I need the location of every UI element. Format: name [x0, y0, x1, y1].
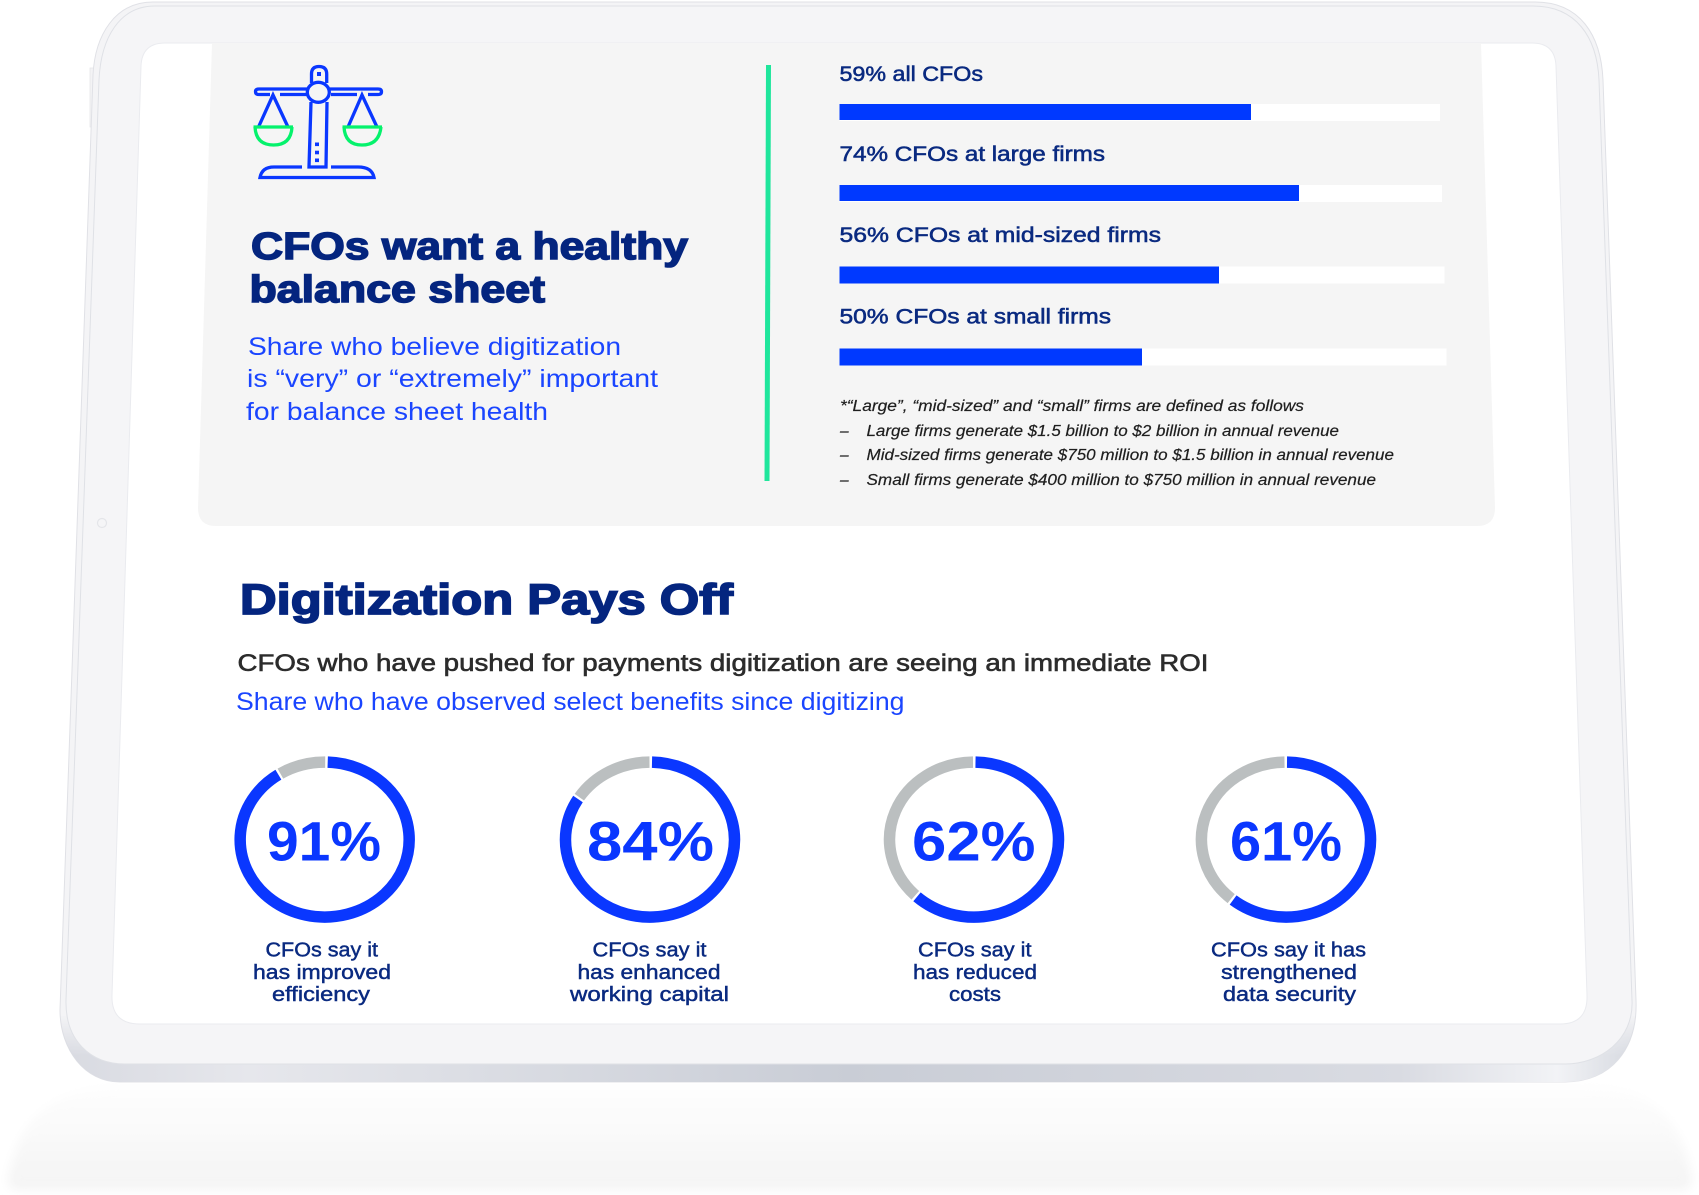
green divider — [764, 65, 771, 481]
heading: Digitization Pays Off: Digitization Pays Off — [240, 576, 734, 624]
bar: large firms — [840, 143, 1442, 202]
donut: 84% enhanced working capital: 84% — [587, 810, 714, 873]
donut: 91% improved efficiency — [240, 762, 409, 1006]
caption: strengthened data security: CFOs say it has — [1211, 940, 1366, 962]
bar: small firms: 50% CFOs at small firms — [840, 306, 1111, 328]
heading: CFOs want a healthy balance sheet — [250, 226, 688, 311]
bar: large firms: 74% CFOs at large firms — [840, 143, 1105, 166]
footnote: firm size definitions: *“Large”, “mid-sized” and “small” firms are defined as follows — [840, 398, 1304, 415]
tablet bottom edge band — [62, 1026, 1634, 1082]
side button — [90, 68, 94, 127]
bar: all CFOs — [840, 63, 1440, 121]
bar: all CFOs: 59% all CFOs — [840, 63, 983, 86]
heading: CFOs want a healthy balance sheet: CFOs want a healthy — [251, 226, 688, 268]
text block: share who believe: for balance sheet health — [246, 398, 548, 426]
icon: balance scale — [254, 66, 382, 178]
caption: reduced costs: costs — [949, 984, 1001, 1006]
caption: enhanced working capital: has enhanced — [578, 962, 720, 984]
donut: 62% reduced costs — [890, 762, 1058, 1006]
caption: improved efficiency — [253, 940, 391, 1006]
footnote: firm size definitions: – — [839, 423, 849, 440]
caption: reduced costs — [913, 940, 1037, 1006]
footnote: firm size definitions: Large firms generate $1.5 billion to $2 billion in annual revenue — [866, 423, 1339, 440]
caption: improved efficiency: efficiency — [272, 984, 370, 1006]
caption: reduced costs: CFOs say it — [918, 940, 1032, 962]
footnote: firm size definitions: – — [839, 447, 849, 464]
text block: share who believe — [246, 333, 658, 426]
camera dot — [98, 518, 106, 528]
caption: strengthened data security: data security — [1223, 984, 1356, 1006]
caption: enhanced working capital — [569, 940, 729, 1006]
tablet ground shadow — [8, 1084, 1692, 1190]
tablet screen — [112, 43, 1587, 1024]
panel: balance sheet — [198, 43, 1495, 526]
bar: mid-sized firms — [840, 224, 1444, 284]
subheading: immediate ROI: CFOs who have pushed for payments digitization are seeing an immediate ROI — [238, 650, 1208, 677]
footnote: firm size definitions: Small firms generate $400 million to $750 million in annual revenue — [866, 472, 1376, 489]
text block: share who observed benefits: Share who have observed select benefits since digitizing — [236, 688, 904, 716]
donut: 91% improved efficiency: 91% — [267, 810, 381, 873]
caption: enhanced working capital: working capital — [569, 984, 729, 1006]
caption: enhanced working capital: CFOs say it — [592, 940, 707, 962]
text block: share who believe: is “very” or “extremely” important — [247, 365, 658, 393]
donut: 61% strengthened data security: 61% — [1230, 810, 1342, 873]
footnote: firm size definitions — [839, 398, 1394, 489]
bar: small firms — [840, 306, 1446, 366]
caption: reduced costs: has reduced — [913, 962, 1037, 984]
footnote: firm size definitions: – — [839, 472, 849, 489]
caption: strengthened data security: strengthened — [1221, 962, 1357, 984]
bar: mid-sized firms: 56% CFOs at mid-sized firms — [840, 224, 1161, 247]
donut: 62% reduced costs: 62% — [912, 810, 1036, 873]
donut: 84% enhanced working capital — [565, 762, 734, 1006]
text block: share who believe: Share who believe digitization — [248, 333, 621, 361]
bar chart: digitization importance — [840, 63, 1446, 366]
heading: CFOs want a healthy balance sheet: balance sheet — [250, 269, 545, 311]
donut: 61% strengthened data security — [1201, 762, 1371, 1006]
caption: improved efficiency: CFOs say it — [266, 940, 378, 962]
footnote: firm size definitions: Mid-sized firms generate $750 million to $1.5 billion in annual revenue — [866, 447, 1394, 464]
caption: strengthened data security — [1211, 940, 1366, 1006]
caption: improved efficiency: has improved — [253, 962, 391, 984]
